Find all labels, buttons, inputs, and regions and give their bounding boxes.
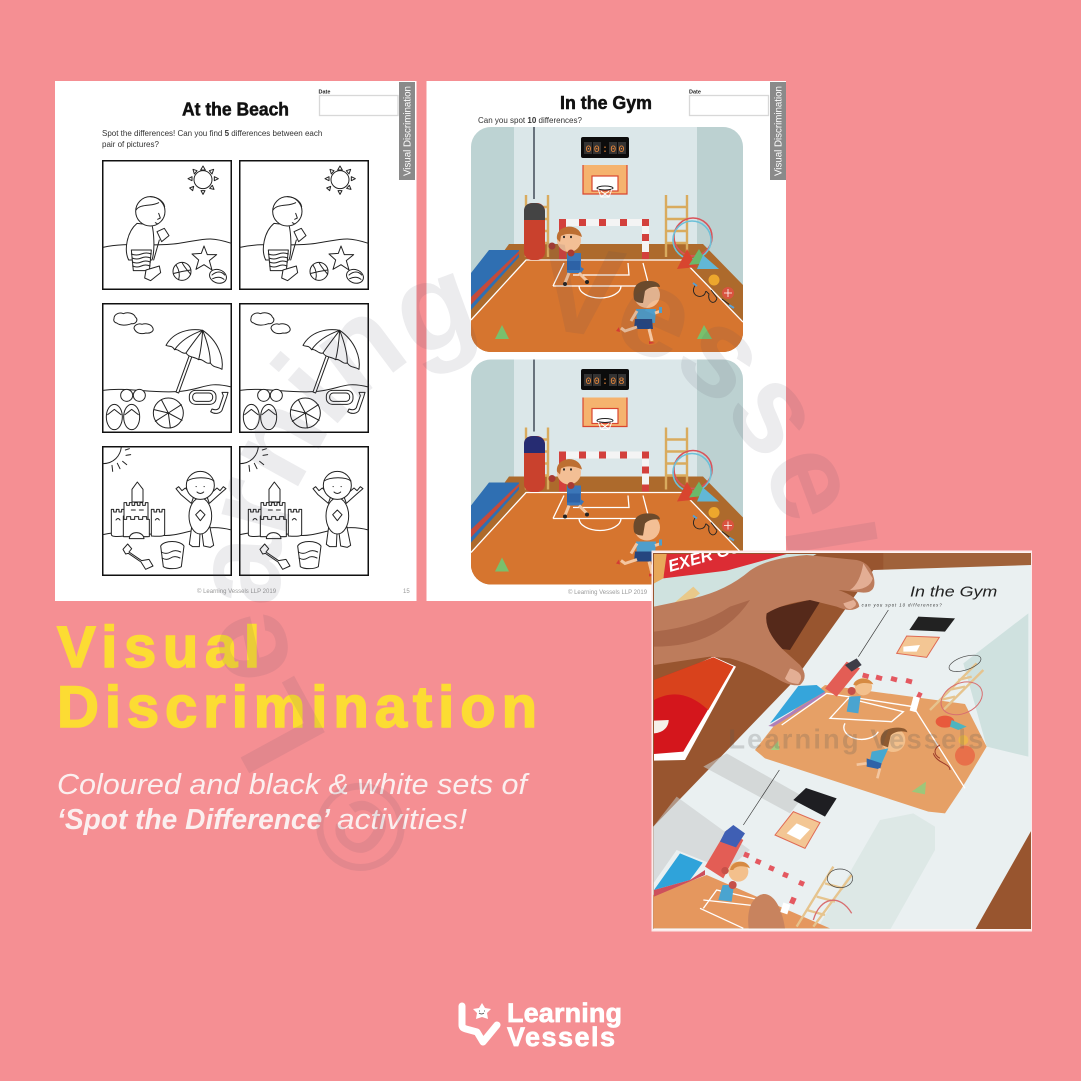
book: red cover [654, 657, 736, 761]
watermark: curved text: © Learning Vessels [213, 242, 878, 871]
instruction: Can you spot 10 differences? [478, 116, 582, 125]
picture pair: sand castle [103, 447, 368, 575]
title: Visual Discrimination [57, 615, 537, 740]
heading: At the Beach: At the Beach [182, 100, 289, 120]
brand name: Learning [507, 998, 622, 1028]
side tab: Visual Discrimination [774, 86, 784, 176]
instructions: pair of pictures? [102, 140, 159, 149]
scoreboard 00:08 [581, 369, 629, 390]
subtitle [57, 769, 530, 836]
punching bag [524, 203, 545, 260]
photo: child using the worksheet [650, 537, 1035, 935]
scoreboard 00:08: 00:08 [586, 377, 624, 388]
worksheet in photo: can you spot 10 differences? [862, 603, 942, 608]
worksheet: In the Gym [426, 81, 786, 601]
title: Visual Discrimination: Visual [57, 615, 260, 680]
watermark text in photo: Learning Vessels [728, 723, 983, 754]
book: exercise [654, 553, 816, 607]
footer: © Learning Vessels LLP 2019 [197, 588, 277, 595]
picture pair: boy with bucket [103, 161, 368, 289]
page number: 15 [403, 589, 410, 595]
gym scene: bottom [471, 360, 743, 584]
hand [654, 555, 874, 685]
title: Visual Discrimination: Discrimination [57, 675, 537, 740]
worksheet in photo: In the Gym [910, 585, 997, 601]
icon: LV mark with star [462, 1003, 497, 1042]
brand name: Vessels [507, 1022, 615, 1052]
side tab: Visual Discrimination [402, 86, 414, 176]
scoreboard 00:00 [581, 137, 629, 158]
punching bag [524, 436, 545, 492]
worksheet in photo [653, 565, 1032, 930]
table [650, 550, 1035, 935]
side tab [399, 82, 415, 180]
heading: In the Gym: In the Gym [560, 93, 652, 113]
logo: Learning Vessels [462, 998, 622, 1052]
subtitle: Coloured and black & white sets of [57, 769, 530, 801]
picture pair: umbrella [103, 304, 368, 432]
date field: Date [689, 90, 701, 96]
gym scene in photo: top [755, 617, 988, 813]
date field [689, 90, 768, 116]
book: exercise: EXER GU [666, 537, 744, 576]
gym scene in photo: bottom [653, 788, 853, 928]
subtitle: activities! [337, 804, 467, 836]
scoreboard 00:00: 00:00 [586, 145, 624, 156]
date field [318, 90, 398, 116]
worksheet: At the Beach [55, 81, 416, 601]
side tab [770, 82, 786, 180]
instructions: Spot the differences! Can you find 5 differences between each [102, 129, 322, 138]
footer: © Learning Vessels LLP 2019 [568, 589, 648, 596]
subtitle: ‘Spot the Difference’ [57, 804, 331, 836]
date field: Date [318, 90, 330, 96]
gym scene: top [471, 127, 743, 352]
brand name [507, 998, 622, 1052]
